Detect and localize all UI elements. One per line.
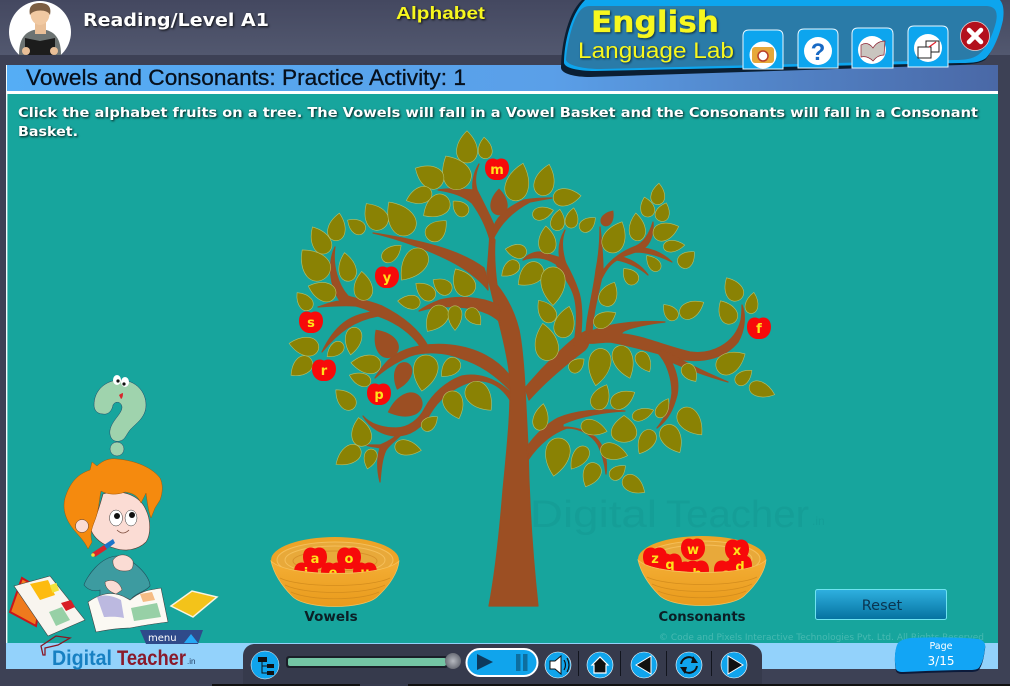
reset button bbox=[816, 590, 946, 620]
vowel apples bbox=[294, 548, 377, 573]
boy face bbox=[91, 492, 150, 550]
next button bbox=[721, 652, 747, 678]
apple: p: p bbox=[374, 388, 384, 403]
boy smile bbox=[117, 530, 129, 533]
menu tab bbox=[140, 630, 203, 644]
reset button: Reset bbox=[862, 598, 903, 614]
tree bbox=[285, 131, 777, 606]
tree menu button bbox=[251, 651, 279, 679]
navigation bar bbox=[243, 644, 762, 686]
watermark: Teacher bbox=[666, 494, 809, 536]
left border line bbox=[6, 65, 7, 643]
watermark bbox=[530, 494, 825, 536]
tab: help: ? bbox=[811, 39, 825, 66]
boy body bbox=[84, 556, 150, 606]
boy lower hand bbox=[105, 580, 122, 594]
apple: f: f bbox=[756, 322, 762, 337]
watermark: Digital bbox=[530, 494, 657, 536]
bottom edge strip bbox=[212, 684, 1010, 686]
home button bbox=[587, 652, 613, 678]
label: consonants: Consonants bbox=[658, 609, 746, 625]
header band bbox=[0, 0, 1010, 55]
footer strip bbox=[6, 643, 998, 669]
brown leaves bbox=[367, 188, 618, 423]
page indicator bbox=[895, 637, 985, 674]
instruction text bbox=[18, 105, 979, 140]
vowel apples: i bbox=[304, 566, 308, 581]
logo words: Language Lab: Language Lab bbox=[578, 38, 734, 63]
heading: topic: Alphabet bbox=[396, 3, 485, 23]
tab: window bbox=[908, 26, 948, 67]
apple: s: s bbox=[307, 316, 315, 331]
consonant apples: h bbox=[692, 567, 702, 582]
copyright: © Code and Pixels Interactive Technologies Pvt. Ltd. All Rights Reserved bbox=[659, 633, 984, 643]
slider knob bbox=[445, 653, 461, 669]
boy hand bbox=[113, 555, 133, 571]
character: boy bbox=[64, 459, 162, 606]
label: vowels: Vowels bbox=[304, 609, 358, 625]
apple: p bbox=[367, 384, 391, 405]
tree leaves bbox=[285, 131, 777, 499]
consonant apples: x bbox=[733, 544, 742, 559]
apple: s bbox=[299, 312, 323, 333]
apple: f bbox=[747, 318, 771, 339]
avatar: reading student bbox=[9, 1, 71, 55]
vowel apples: o bbox=[345, 552, 354, 567]
previous button bbox=[631, 652, 657, 678]
play pause pill bbox=[466, 649, 538, 676]
tab: history bbox=[743, 30, 783, 69]
close button bbox=[960, 22, 990, 50]
open book bbox=[88, 588, 168, 632]
title: activity: Vowels and Consonants: Practice Activity: 1 bbox=[26, 65, 466, 90]
logo word: English: English bbox=[591, 5, 719, 39]
consonant apples: z bbox=[651, 552, 659, 567]
vowel apples: a bbox=[311, 552, 319, 567]
boy hair bbox=[64, 459, 162, 549]
tab: help bbox=[798, 29, 838, 68]
progress slider bbox=[286, 656, 448, 668]
consonant apples: w bbox=[687, 543, 699, 558]
consonant apples: o bbox=[722, 567, 731, 582]
consonant basket bbox=[638, 536, 766, 606]
apple: r: r bbox=[321, 364, 328, 379]
boy pen bbox=[91, 539, 115, 557]
boy eyes bbox=[110, 510, 137, 526]
logo: Digital Teacher bbox=[41, 636, 195, 670]
heading: level: Reading/Level A1 bbox=[83, 11, 269, 31]
page indicator: Page bbox=[930, 641, 953, 652]
apple: m: m bbox=[490, 163, 504, 178]
apple: m bbox=[485, 158, 509, 180]
consonant apples: d bbox=[735, 560, 745, 575]
refresh button bbox=[676, 652, 702, 678]
logo: Digital Teacher: Digital bbox=[52, 646, 112, 670]
apple: y: y bbox=[383, 271, 392, 286]
tab: book bbox=[852, 28, 893, 68]
consonant apples: q bbox=[665, 558, 675, 573]
instruction text: Click the alphabet fruits on a tree. The Vowels will fall in a Vowel Basket and the Consonants will fall in a Consonant bbox=[18, 105, 979, 121]
apple: r bbox=[312, 360, 336, 381]
boy ear bbox=[76, 520, 88, 532]
title bar background bbox=[7, 65, 998, 91]
tree branches bbox=[318, 164, 744, 606]
logo: Digital Teacher: Teacher bbox=[117, 646, 187, 670]
yellow book bbox=[171, 591, 217, 617]
title underline bbox=[7, 91, 998, 94]
page indicator: 3/15 bbox=[928, 654, 954, 668]
activity area bbox=[7, 94, 998, 643]
left book stack bbox=[10, 576, 85, 636]
instruction text: Basket. bbox=[18, 124, 78, 140]
apple: y bbox=[375, 266, 399, 288]
menu tab: menu bbox=[148, 633, 177, 644]
consonant apples: . bbox=[679, 567, 683, 582]
consonant apples bbox=[643, 538, 752, 572]
character: question mark worm bbox=[94, 375, 146, 456]
watermark: .in bbox=[812, 514, 825, 528]
vowel basket bbox=[271, 537, 399, 606]
vowel apples: u bbox=[360, 566, 370, 581]
sound button bbox=[545, 652, 571, 678]
logo: Digital Teacher: .in bbox=[187, 657, 195, 666]
English Language Lab panel bbox=[561, 0, 1004, 77]
vowel apples: e bbox=[329, 566, 338, 581]
